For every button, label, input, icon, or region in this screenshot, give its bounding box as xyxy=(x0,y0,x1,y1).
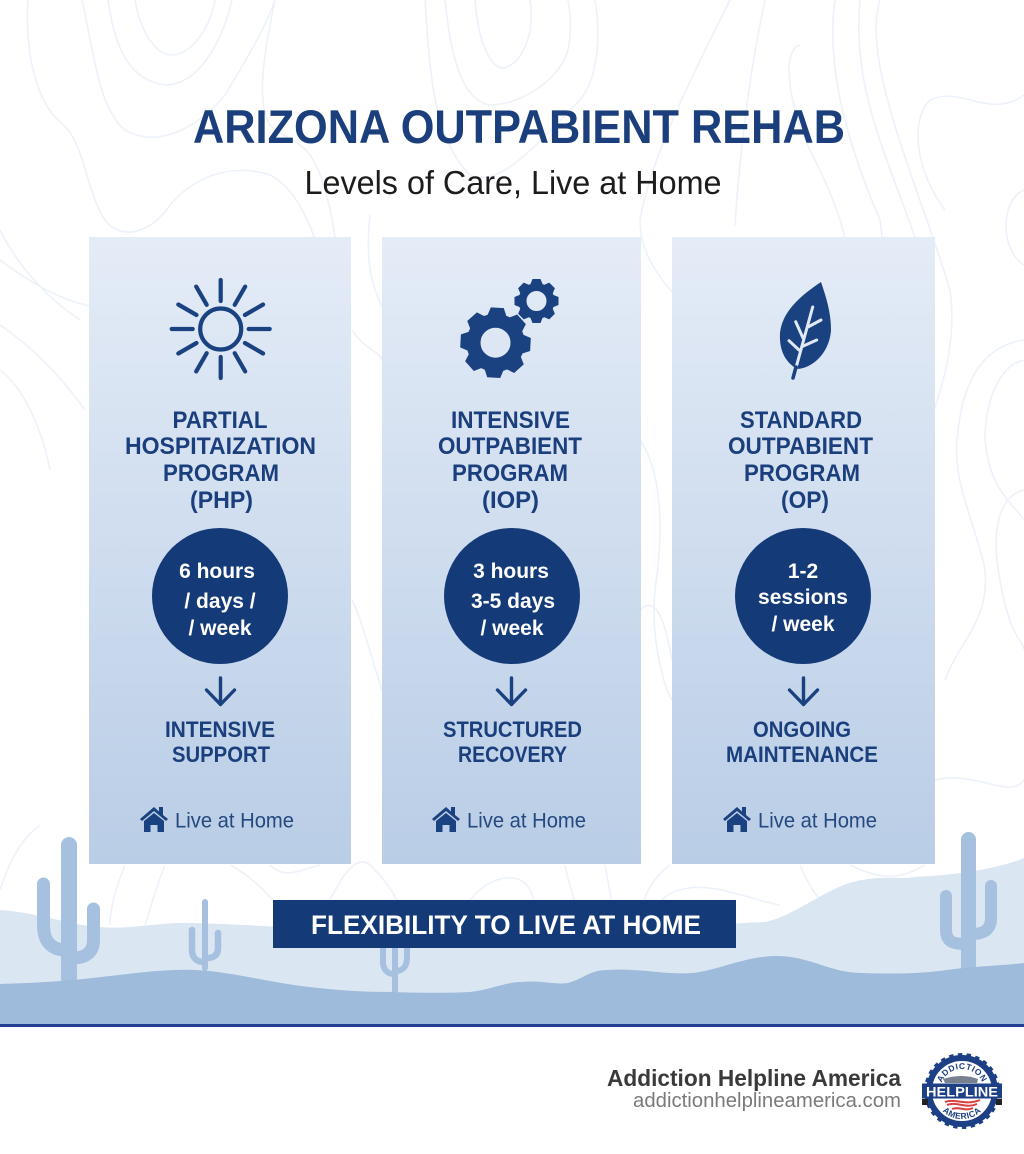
panel: standard outpatient program xyxy=(672,237,935,864)
badge: IOP schedule xyxy=(444,528,580,664)
logo badge xyxy=(922,1053,1002,1129)
banner: flexibility to live at home: FLEXIBILITY TO LIVE AT HOME xyxy=(311,910,701,940)
front hills xyxy=(0,956,1024,1026)
heading: OP: (OP) xyxy=(781,487,829,514)
arrow xyxy=(498,678,526,704)
live at home xyxy=(723,807,877,832)
badge: OP schedule: / week xyxy=(771,613,835,636)
heading: IOP: INTENSIVE xyxy=(451,407,570,434)
heading: IOP: (IOP) xyxy=(482,487,539,514)
cactus left large xyxy=(44,837,94,987)
heading: IOP: OUTPABIENT xyxy=(438,433,582,460)
label: intensive support: SUPPORT xyxy=(172,742,271,767)
heading: IOP xyxy=(438,407,582,514)
badge: PHP schedule: / days / xyxy=(184,590,256,613)
footer divider xyxy=(0,1024,1024,1027)
cactus right large xyxy=(946,832,991,977)
live at home xyxy=(140,807,294,832)
back hills xyxy=(0,858,1024,1024)
title: ARIZONA OUTPABIENT REHAB xyxy=(193,101,845,154)
panel: intensive outpatient program xyxy=(382,237,641,864)
heading: PHP: (PHP) xyxy=(190,487,253,514)
badge: IOP schedule: 3 hours xyxy=(473,560,549,583)
badge: IOP schedule: / week xyxy=(480,617,544,640)
badge: PHP schedule: 6 hours xyxy=(179,560,255,583)
heading: PHP: PARTIAL xyxy=(172,407,268,434)
icon: leaf xyxy=(780,282,831,378)
heading: PHP: PROGRAM xyxy=(163,460,279,487)
live at home: Live at Home xyxy=(175,810,294,832)
live at home: Live at Home xyxy=(758,810,877,832)
icon: gears xyxy=(459,279,558,379)
footer brand text: addictionhelplineamerica.com xyxy=(633,1090,901,1112)
heading: OP: OUTPABIENT xyxy=(728,433,873,460)
label: structured recovery: STRUCTURED xyxy=(443,717,582,742)
heading: PHP: HOSPITAIZATION xyxy=(125,433,316,460)
footer brand text xyxy=(607,1065,902,1112)
badge: OP schedule: sessions xyxy=(758,586,848,609)
logo badge: ADDICTION xyxy=(938,1063,988,1082)
heading: IOP: PROGRAM xyxy=(452,460,568,487)
heading: OP xyxy=(728,407,873,514)
badge: PHP schedule xyxy=(152,528,288,664)
label: ongoing maintenance: MAINTENANCE xyxy=(726,742,878,767)
label: structured recovery: RECOVERY xyxy=(458,742,567,767)
icon: sun xyxy=(172,280,270,378)
label: intensive support: INTENSIVE xyxy=(165,717,275,742)
heading: PHP xyxy=(125,407,316,514)
badge: IOP schedule: 3-5 days xyxy=(471,590,555,613)
logo badge: HELPLINE xyxy=(926,1084,998,1100)
subtitle: Levels of Care, Live at Home xyxy=(304,164,722,201)
panel: partial hospitalization program xyxy=(89,237,351,864)
heading: OP: STANDARD xyxy=(740,407,862,434)
arrow xyxy=(790,678,818,704)
desert landscape xyxy=(0,832,1024,1026)
arrow xyxy=(206,678,234,704)
badge: OP schedule xyxy=(735,528,871,664)
label: ongoing maintenance xyxy=(726,717,878,767)
cactus center xyxy=(383,940,407,994)
live at home xyxy=(432,807,586,832)
footer brand text: Addiction Helpline America xyxy=(607,1065,902,1091)
banner: flexibility to live at home xyxy=(273,900,736,948)
heading: OP: PROGRAM xyxy=(744,460,860,487)
label: ongoing maintenance: ONGOING xyxy=(753,717,851,742)
label: structured recovery xyxy=(443,717,582,767)
logo badge: AMERICA xyxy=(942,1108,981,1120)
label: intensive support xyxy=(165,717,275,767)
badge: PHP schedule: / week xyxy=(188,617,252,640)
live at home: Live at Home xyxy=(467,810,586,832)
badge: OP schedule: 1-2 xyxy=(788,560,818,583)
cactus small xyxy=(192,899,218,971)
